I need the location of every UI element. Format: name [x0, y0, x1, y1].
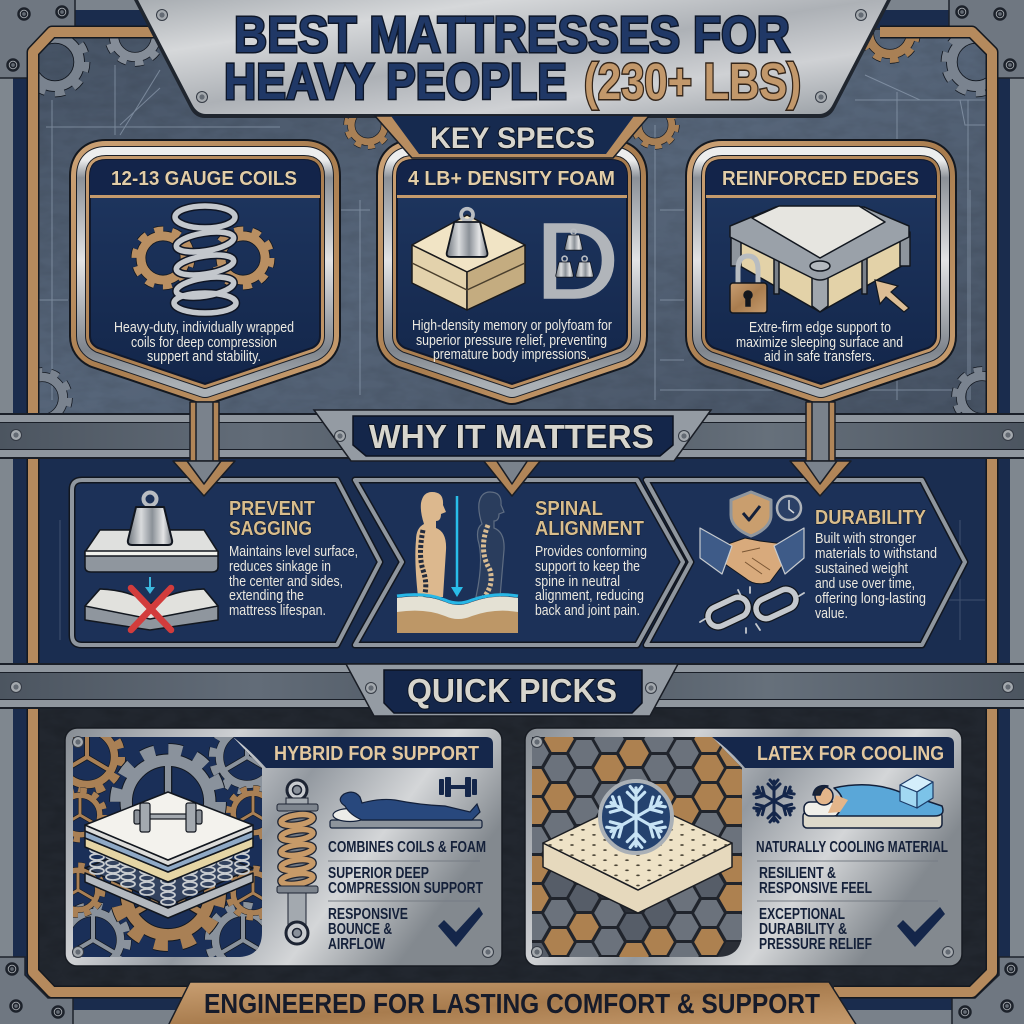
icon: aligned body [415, 492, 446, 597]
arrow: foam to spinal alignment [483, 460, 541, 496]
arrow: coils to prevent sagging [173, 402, 235, 496]
panel: 12-13 gauge coils [90, 160, 320, 384]
header band [233, 737, 493, 768]
icon: check mark [438, 907, 483, 947]
panel: latex for cooling [524, 728, 962, 966]
divider bar: quick picks [0, 663, 1024, 709]
icon: sleeper with cooling blanket [803, 785, 943, 828]
feature list: AIRFLOW [328, 936, 385, 953]
panel: spinal alignment [355, 480, 683, 645]
feature list: EXCEPTIONAL [759, 906, 845, 923]
description [736, 320, 903, 365]
plate: why it matters [314, 410, 711, 461]
description: materials to withstand [815, 546, 937, 562]
icon: sleeper on mattress [330, 792, 482, 828]
heading: 4 LB+ DENSITY FOAM [408, 168, 615, 190]
icon: clock [777, 496, 801, 520]
icon: handshake [700, 528, 804, 584]
icon: reinforced mattress corner [730, 206, 910, 312]
feature list: DURABILITY & [759, 921, 847, 938]
icon: snowflake [753, 780, 795, 822]
heading: DURABILITY [815, 507, 927, 529]
icon: shield [731, 492, 771, 536]
heading [229, 498, 315, 540]
icon: misaligned body [476, 492, 504, 597]
feature list [328, 839, 486, 953]
feature list: RESILIENT & [759, 865, 836, 882]
heading: SAGGING [229, 518, 312, 540]
description: back and joint pain. [535, 603, 640, 619]
feature list: RESPONSIVE [328, 906, 408, 923]
icon: broken chain [700, 586, 804, 633]
heading: KEY SPECS [430, 122, 595, 155]
description: High-density memory or polyfoam for [412, 318, 612, 334]
description: premature body impressions. [433, 347, 590, 363]
illustration: latex mattress [543, 798, 732, 913]
panel: hybrid for support [53, 723, 502, 974]
footer banner [168, 982, 857, 1024]
description: Maintains level surface, [229, 544, 358, 560]
description: value. [815, 606, 848, 622]
icon: pointer arrow [875, 280, 909, 312]
description: spine in neutral [535, 574, 620, 590]
description: extending the [229, 588, 304, 604]
description [412, 318, 612, 363]
panel: durability [646, 480, 965, 645]
heading: LATEX FOR COOLING [757, 743, 944, 765]
heading: HYBRID FOR SUPPORT [274, 743, 479, 765]
feature list: PRESSURE RELIEF [759, 936, 872, 953]
icon: check mark [897, 907, 945, 947]
description: maximize sleeping surface and [736, 335, 903, 351]
tagline: ENGINEERED FOR LASTING COMFORT & SUPPORT [204, 988, 820, 1019]
banner: key specs [375, 116, 649, 158]
illustration: hybrid mattress [85, 792, 253, 918]
gears: frame decoration [16, 7, 1008, 424]
heading: REINFORCED EDGES [722, 168, 919, 190]
description: Extre-firm edge support to [749, 320, 891, 336]
heading: PREVENT [229, 498, 315, 520]
feature list: NATURALLY COOLING MATERIAL [756, 839, 948, 856]
description: reduces sinkage in [229, 559, 331, 575]
description: Built with stronger [815, 531, 916, 547]
feature list: COMPRESSION SUPPORT [328, 880, 483, 897]
feature list: COMBINES COILS & FOAM [328, 839, 486, 856]
icon: small dumbbell [439, 777, 477, 797]
description: alignment, reducing [535, 588, 644, 604]
icon: conforming mattress [397, 595, 518, 633]
icon: ice cube [900, 775, 933, 808]
icon: gears [136, 231, 270, 285]
feature list: RESPONSIVE FEEL [759, 880, 872, 897]
plate: quick picks [346, 664, 678, 716]
description: sustained weight [815, 561, 908, 577]
icon: weight on level mattress [85, 492, 218, 572]
icon: density letter D with weights: D [535, 200, 619, 321]
arrow: edges to durability [790, 402, 851, 496]
icon: snowflake badge [600, 781, 672, 853]
title line 1: BEST MATTRESSES FOR [234, 6, 790, 63]
panel: 4 lb+ density foam [397, 160, 627, 384]
title line 2: HEAVY PEOPLE [224, 53, 567, 110]
description: support to keep the [535, 559, 640, 575]
description [229, 544, 358, 619]
blueprint line work [30, 65, 985, 640]
description: superior pressure relief, preventing [416, 333, 607, 349]
icon: coil spring [174, 206, 236, 313]
heading: 12-13 GAUGE COILS [111, 168, 297, 190]
panel: prevent sagging [72, 480, 380, 645]
title plate [133, 0, 892, 118]
divider bar: why it matters [0, 413, 1024, 459]
description [114, 320, 294, 365]
heading: WHY IT MATTERS [369, 418, 654, 455]
description: coils for deep compression [131, 335, 277, 351]
title weight range: (230+ LBS) [584, 53, 801, 110]
description [815, 531, 937, 622]
illustration: gears background [73, 737, 262, 957]
icon: sagging mattress with red cross [85, 577, 218, 630]
heading: SPINAL [535, 498, 603, 520]
icon: shock absorber [277, 780, 318, 944]
description: the center and sides, [229, 574, 343, 590]
panel: reinforced edges [706, 160, 936, 384]
description: suppert and stability. [147, 349, 261, 365]
illustration: hexagon pattern [532, 737, 742, 957]
description: Heavy-duty, individually wrapped [114, 320, 294, 336]
description: mattress lifespan. [229, 603, 326, 619]
heading: QUICK PICKS [407, 672, 617, 709]
heading: ALIGNMENT [535, 518, 644, 540]
header band [712, 737, 954, 768]
heading [535, 498, 644, 540]
description: Provides conforming [535, 544, 647, 560]
icon: foam block with weight [412, 209, 525, 310]
icon: padlock [730, 256, 767, 313]
description: offering long-lasting [815, 591, 926, 607]
icon: alignment arrow [451, 496, 463, 597]
description [535, 544, 647, 619]
feature list: BOUNCE & [328, 921, 392, 938]
feature list: SUPERIOR DEEP [328, 865, 429, 882]
feature list [756, 839, 948, 953]
description: aid in safe transfers. [764, 349, 875, 365]
icon: dumbbell [134, 803, 202, 832]
description: and use over time, [815, 576, 915, 592]
